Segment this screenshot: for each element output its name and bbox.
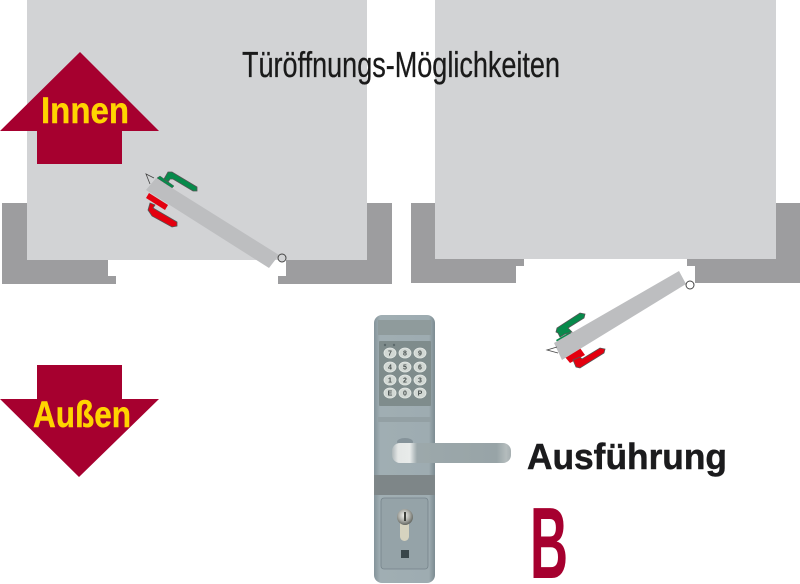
wall frame left side — [411, 203, 524, 283]
opening arrow tip — [547, 347, 558, 353]
title: Türöffnungs-Möglichkeiten — [242, 44, 560, 85]
arrow: Außen — [0, 365, 159, 477]
door leaf swung outward — [554, 271, 686, 360]
wall frame right side — [687, 203, 800, 283]
room floor left — [27, 0, 367, 260]
icon: red handle — [146, 193, 177, 227]
keypad: 0 — [403, 390, 407, 398]
keypad: 6 — [418, 364, 422, 372]
status lights — [384, 344, 386, 346]
opening arrow tip — [146, 174, 154, 184]
keypad: 5 — [403, 364, 407, 372]
icon: green handle — [556, 313, 585, 343]
keypad: 2 — [403, 378, 407, 384]
keypad: 7 — [388, 350, 392, 358]
keypad: P — [418, 390, 423, 398]
room floor right — [435, 0, 776, 259]
arrow: Innen — [0, 52, 159, 164]
wall frame right side — [278, 203, 392, 284]
electronic keypad door lock — [374, 315, 511, 583]
keypad — [379, 341, 431, 406]
wall frame left side — [2, 203, 116, 284]
hinge — [278, 254, 286, 262]
keypad: 4 — [388, 364, 392, 372]
lock faceplate — [374, 315, 435, 583]
key cylinder — [400, 517, 409, 541]
door leaf swung inward — [146, 178, 279, 268]
heading: Ausführung: Ausführung — [527, 436, 727, 477]
lever handle — [392, 438, 511, 463]
small logo — [401, 550, 409, 558]
dark band — [374, 475, 435, 495]
keypad: E — [388, 390, 393, 398]
arrow: Innen: Innen — [41, 90, 129, 131]
keypad: 1 — [388, 378, 392, 384]
hinge — [686, 281, 694, 289]
top cap detail — [378, 320, 431, 335]
keypad: 3 — [418, 378, 422, 384]
panel: right door room (outside opening) — [411, 0, 800, 368]
panel: left door room (inside opening) — [2, 0, 392, 284]
lower cylinder plate — [381, 498, 428, 569]
keypad: 8 — [403, 350, 407, 358]
keypad: 9 — [418, 350, 422, 358]
groove below keypad — [378, 417, 431, 422]
icon: green handle — [157, 172, 197, 191]
arrow: Außen: Außen — [33, 394, 131, 435]
icon: red handle — [565, 348, 605, 368]
